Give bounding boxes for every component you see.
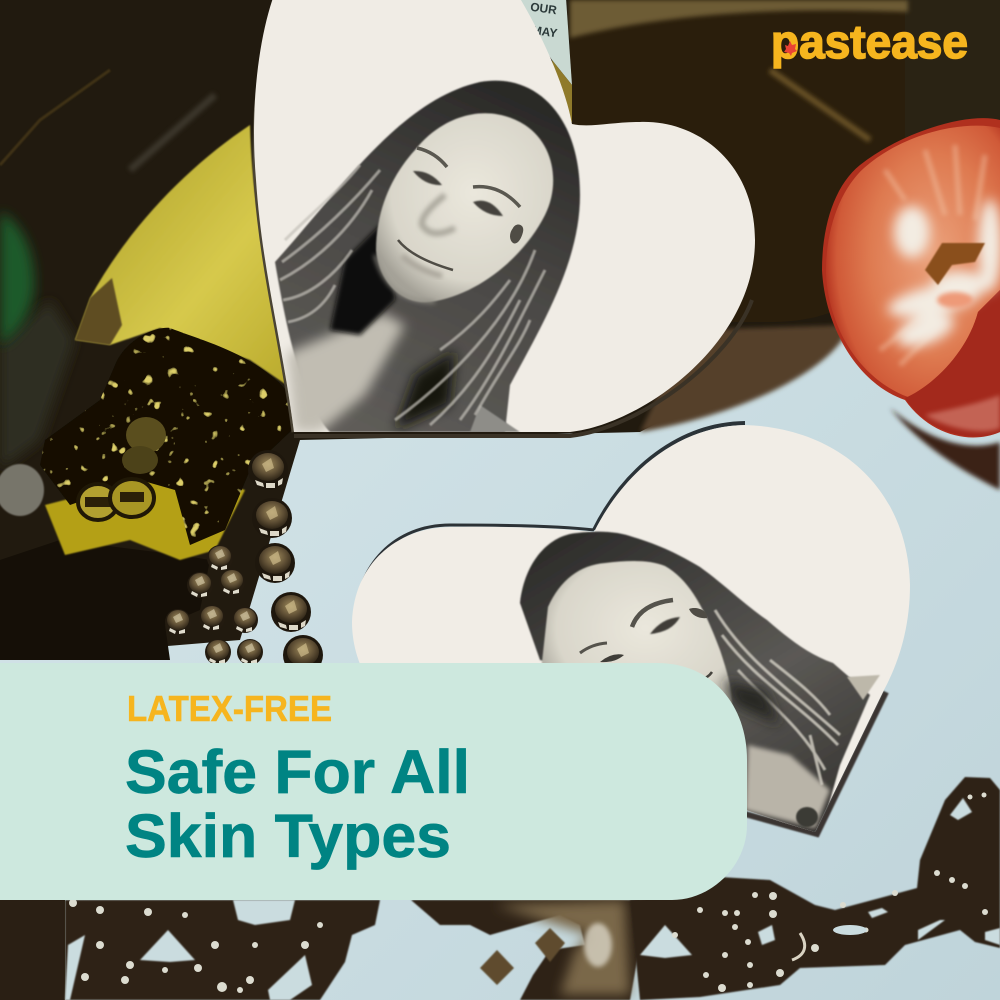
dark corner block: [0, 900, 65, 1000]
bottom right eye: [650, 617, 680, 634]
green bottle edge: [0, 212, 34, 345]
chain left: [65, 900, 380, 1000]
heart card: bottom, with portrait: [340, 420, 920, 840]
bottom portrait: face: [540, 561, 732, 720]
bottom portrait: beige corner: [847, 675, 880, 700]
chain oval: [833, 925, 867, 935]
card behind heart with small text: OUR: [529, 0, 558, 17]
strawberry: [822, 118, 1000, 437]
top portrait: hair streaks: [280, 165, 545, 425]
right eye: [473, 201, 503, 216]
top portrait: hair: [275, 81, 580, 432]
chain clasp arc: [792, 933, 805, 960]
logo: pastease: [771, 15, 968, 68]
bottom portrait: hair streaks: [715, 610, 840, 785]
heart shadow, top: [294, 300, 752, 436]
nose: [422, 195, 455, 233]
top portrait: dark hair under chin: [330, 215, 395, 335]
chain right: [630, 777, 1000, 1000]
chain sparkle dots: [69, 792, 988, 993]
pile: silver disk: [0, 464, 44, 516]
right brow: [473, 187, 520, 207]
mouth: [398, 240, 453, 270]
strawberry core: [925, 243, 985, 285]
bottom portrait: chest: [745, 745, 830, 828]
strawberry seeded flesh: [905, 290, 1000, 437]
bottom portrait: heart sticker: [689, 608, 707, 618]
top portrait: face: [375, 113, 553, 302]
left eye: [413, 171, 442, 185]
text panel: [0, 663, 747, 900]
card behind heart with small text: [510, 0, 572, 122]
bottom right brow: [632, 600, 673, 627]
yellow fabric: [75, 125, 294, 390]
icon: maple leaf: [784, 41, 797, 56]
gem: loose stones: [535, 928, 565, 962]
necklace chain: bottom: [0, 777, 1000, 1000]
eyebrow label: LATEX-FREE: [127, 688, 332, 729]
heading: Safe For All: [125, 738, 470, 806]
pile: yellow patch: [45, 470, 245, 560]
strawberry white core: [885, 199, 1000, 353]
bottom smile: [706, 671, 713, 678]
rhinestone pile, left: [0, 328, 323, 675]
strawberry shadow: [890, 408, 1000, 490]
chain middle: [411, 900, 640, 1000]
bottom left brow: [580, 643, 607, 653]
pile: bright settings: [78, 417, 166, 520]
background: dark upper scene with bottle: [0, 0, 1000, 660]
heading: Skin Types: [125, 802, 451, 870]
pile: black sparkling mass: [40, 328, 292, 545]
bottom left eye: [600, 654, 624, 662]
pile: dark lower mass: [0, 540, 210, 660]
heart shadow, bottom: [594, 423, 745, 530]
heading: [125, 738, 470, 870]
strawberry cut face: [826, 126, 1000, 397]
left brow: [417, 148, 447, 167]
heart card: top, with portrait: [240, 0, 770, 440]
top portrait: heart sticker: [510, 225, 523, 243]
bottom portrait: hair: [520, 532, 870, 835]
pile: gem strands: [165, 450, 323, 675]
card behind heart with small text: MAY: [531, 23, 558, 40]
top portrait: neck and chest: [287, 313, 405, 432]
